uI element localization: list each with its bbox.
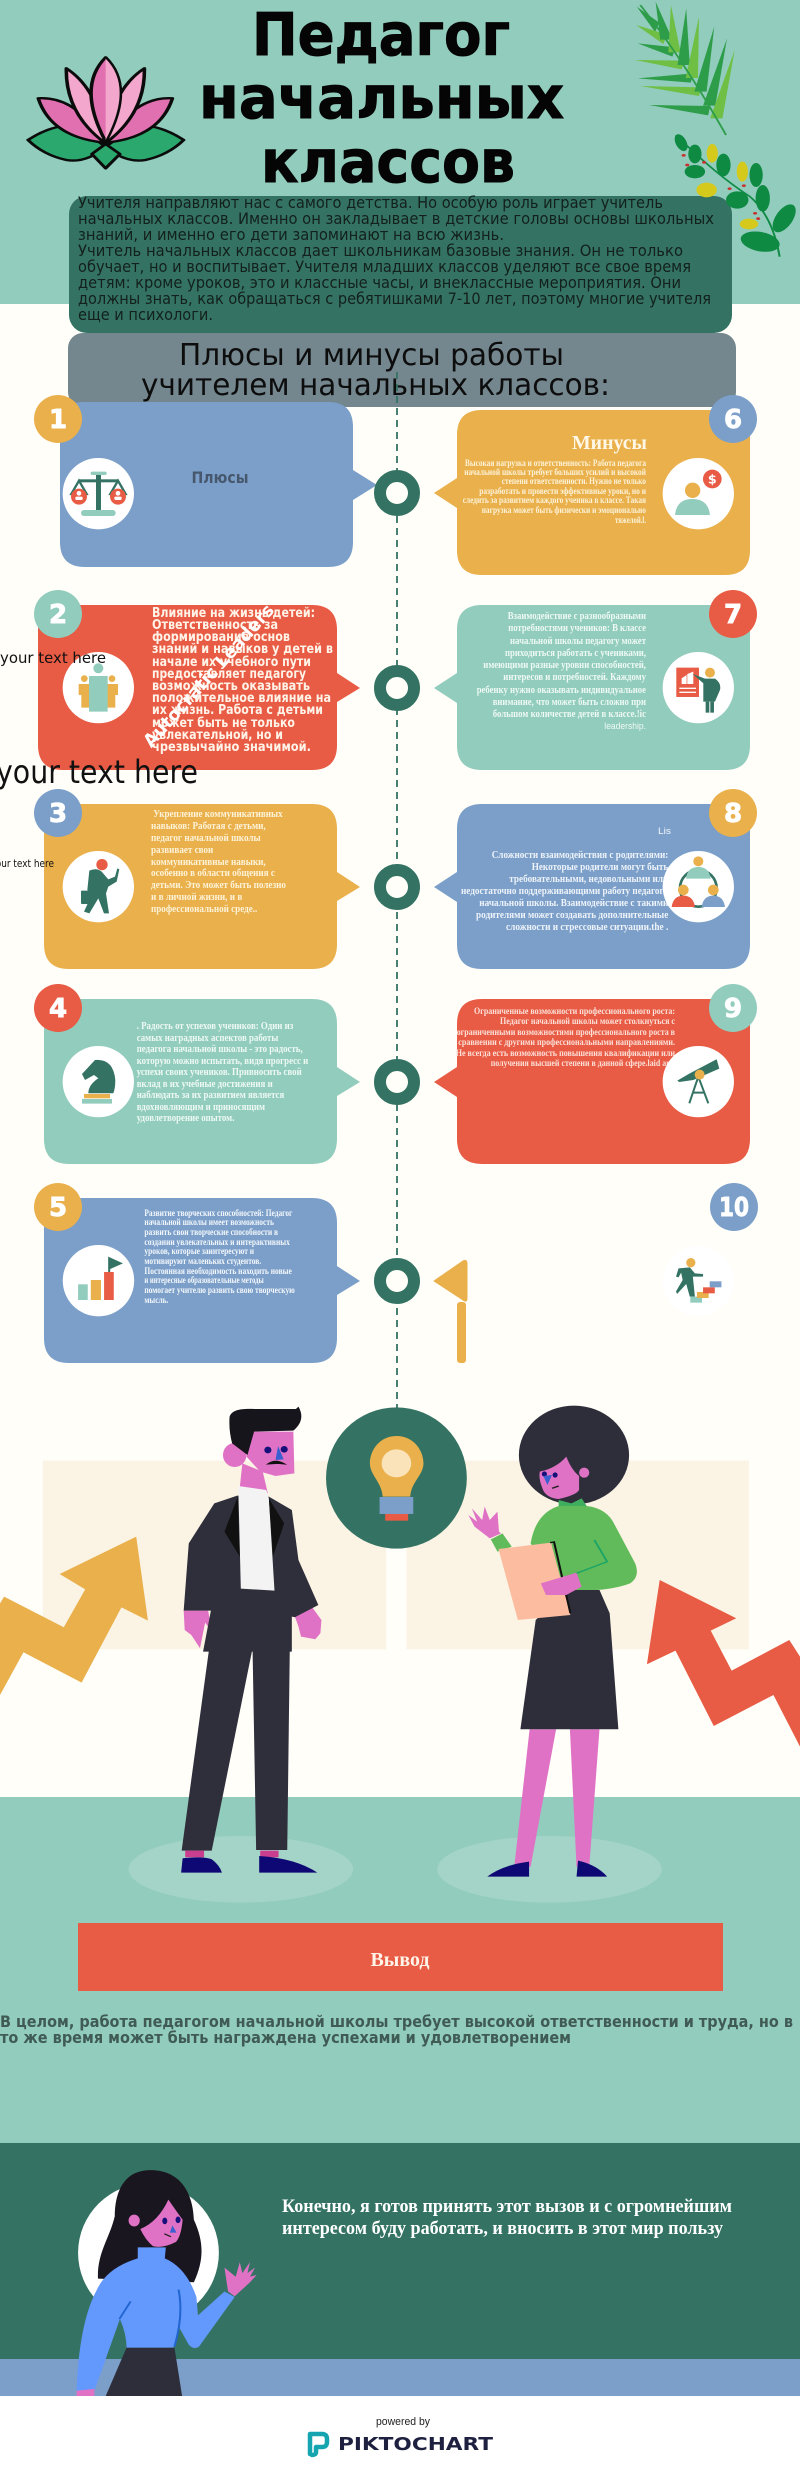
- card 4 text: самых наградных аспектов работы: [137, 1033, 278, 1044]
- intro text: знаний, и именно его дети запоминают на всю жизнь.: [78, 225, 504, 244]
- card 8 text: требовательными, недовольными или: [509, 874, 668, 885]
- badge 5: 5: [49, 1193, 67, 1223]
- panel: card 2: [38, 600, 360, 770]
- badge 9: [709, 984, 757, 1032]
- badge 10: 10: [719, 1193, 749, 1223]
- badge 7: [709, 590, 757, 638]
- card 5 text: мотивируют маленьких студентов.: [144, 1257, 261, 1267]
- panel: card 6 cons: [434, 410, 750, 575]
- card 7 text: имеющими разные уровни способностей,: [483, 660, 646, 671]
- card 7 text: Взаимодействие с разнообразными: [508, 611, 646, 622]
- figure: woman with tablet: [468, 1406, 637, 1877]
- card 2 text: увлекательной, но и: [152, 728, 283, 743]
- card 5 text: [144, 1208, 295, 1306]
- card 6 text: нагрузка может быть физически и эмоционально: [482, 505, 646, 516]
- card 6 text: начальной школы требует больших усилий и высокой: [464, 467, 646, 478]
- card 2 text: предоставляет педагогу: [152, 667, 306, 682]
- background: lower teal ground: [0, 1797, 800, 2143]
- card 4 text: вклад в их учебные достижения и: [137, 1079, 273, 1090]
- card 5 text: помогает учителю развить свою творческую: [144, 1286, 295, 1296]
- card 7 text: большом количестве детей в классе.!ic: [493, 709, 646, 720]
- badge 2: 2: [49, 600, 67, 630]
- intro text: должны знать, как обращаться с ребятишками 7-10 лет, поэтому многие учителя: [78, 289, 711, 308]
- title: начальных: [199, 63, 564, 132]
- badge 1: [34, 395, 82, 443]
- timeline node 1: [380, 476, 414, 510]
- card 2 text: может быть не только: [152, 716, 295, 731]
- card 5 text: развить свои творческие способности в: [144, 1227, 278, 1238]
- icon: runner on stairs: [663, 1246, 734, 1316]
- badge 2: [34, 590, 82, 638]
- card 6 text: тяжелой.l.: [615, 515, 646, 526]
- badge 5: [34, 1183, 82, 1231]
- card 2 text: знаний и навыков у детей в: [152, 642, 333, 657]
- footer white: [0, 2396, 800, 2476]
- panel: card 5: [44, 1198, 360, 1363]
- icon: chess knight: [63, 1046, 134, 1117]
- icon: berry branch: [672, 133, 800, 257]
- badge 3: [34, 789, 82, 837]
- subtitle: учителем начальных классов:: [141, 368, 610, 403]
- card 9 text: ограниченными возможностями профессионального роста в: [457, 1027, 675, 1038]
- card 3 text: развивает свои: [151, 845, 213, 856]
- badge 1: 1: [49, 405, 67, 435]
- icon: bar chart with flag: [63, 1245, 134, 1316]
- ground shadows: [129, 1836, 662, 1903]
- badge 3: 3: [49, 799, 67, 829]
- card 7 text: интересов и потребностей. Каждому: [503, 672, 647, 683]
- title: Педагог: [252, 0, 510, 69]
- card 6 text: Высокая нагрузка и ответственность: Работа педагога: [465, 458, 646, 469]
- card 4 text: [137, 1021, 308, 1124]
- card 9 text: [456, 1006, 676, 1069]
- card 4 text: педагога начальной школы - это радость,: [137, 1044, 303, 1055]
- intro text: Учитель начальных классов дает школьникам базовые знания. Он не только: [78, 241, 683, 260]
- panel: closing dark green band: [0, 2143, 800, 2359]
- panel: card 1 pros: [60, 402, 377, 567]
- badge 4: [34, 984, 82, 1032]
- card 6 text: следить за развитием каждого ученика в классе. Такая: [463, 496, 646, 506]
- card 9 text: Ограниченные возможности профессионального роста:: [474, 1006, 675, 1017]
- arrow red: [647, 1580, 800, 1747]
- title: [199, 0, 564, 196]
- card 4 text: которую можно испытать, видя прогресс и: [137, 1056, 308, 1067]
- card 6 text: [463, 458, 646, 526]
- arrow amber: [0, 1537, 148, 1695]
- closing text: интересом буду работать, и вносить в этот мир пользу: [282, 2218, 723, 2239]
- card 8 text: недостаточно поддерживающими работу педагога: [461, 886, 669, 897]
- timeline node 2: [380, 671, 414, 705]
- figure: man: [181, 1407, 321, 1873]
- conclusion text: то же время может быть награждена успехами и удовлетворением: [0, 2028, 571, 2047]
- card 9 text: получения высшей степени в данной сфере.laid and: [491, 1058, 676, 1069]
- logo: Piktochart: PIKTOCHART: [338, 2434, 494, 2455]
- card 8 text: Некоторые родители могут быть: [532, 862, 669, 873]
- card 2 text: начале их учебного пути: [152, 655, 311, 670]
- card 1 heading: Плюсы: [192, 468, 248, 487]
- timeline node 5: [380, 1264, 414, 1298]
- intro text: начальных классов. Именно он закладывает в детские головы основы школьных: [78, 209, 714, 228]
- card 7 text: потребностями учеников: В классе: [508, 623, 646, 634]
- panel: conclusion heading: Вывод: [370, 1949, 430, 1971]
- beige panels: [43, 1461, 749, 1649]
- card 3 text: Укрепление коммуникативных: [153, 809, 283, 820]
- card 8 text: Сложности взаимодействия с родителями:: [492, 850, 668, 861]
- card 5 text: мысль.: [144, 1296, 168, 1306]
- badge 6: 6: [724, 405, 742, 435]
- icon: palm leaf: [635, 2, 735, 135]
- card 3 text: особенно в области общения с: [151, 868, 275, 879]
- timeline dashed line: [396, 372, 398, 1410]
- closing text: Конечно, я готов принять этот вызов и с огромнейшим: [282, 2196, 732, 2217]
- card 3 text: детьми. Это может быть полезно: [151, 880, 286, 891]
- card 6 heading: Минусы: [572, 432, 647, 454]
- icon: light bulb: [326, 1407, 467, 1549]
- card 9 text: сравнении с другими профессиональными направлениями.: [458, 1037, 675, 1048]
- timeline node 3: [380, 870, 414, 904]
- panel: card 9: [434, 999, 750, 1164]
- card 2 text: их жизнь. Работа с детьми: [152, 703, 323, 718]
- placeholder text large: your text here: [0, 753, 198, 791]
- intro text: [78, 193, 714, 324]
- icon: person with dollar: $: [708, 472, 717, 487]
- card 7 text: начальной школы педагогу может: [510, 636, 647, 647]
- title: классов: [261, 127, 515, 196]
- card 3 text: профессиональной среде..: [151, 904, 258, 915]
- rotated label: Autocratic Leaders: [139, 600, 279, 752]
- panel: conclusion heading: [78, 1923, 723, 1991]
- intro text: Учителя направляют нас с самого детства. Но особую роль играет учитель: [78, 193, 663, 212]
- card 6 text: разработать и провести эффективные уроки, но и: [479, 486, 646, 497]
- card 5 text: начальной школы имеет возможность: [144, 1217, 274, 1228]
- card 3 text: [151, 809, 286, 915]
- card 5 text: и интересные образовательные методы: [144, 1275, 264, 1286]
- card 7 text: ребенку нужно оказывать индивидуальное: [477, 685, 646, 696]
- placeholder text small: your text here: [0, 649, 106, 667]
- icon: presenter with chart: [663, 652, 734, 723]
- badge 8: 8: [724, 799, 742, 829]
- card 8 small label: Lis: [658, 826, 672, 836]
- panel: card 3: [44, 804, 360, 969]
- card 7 text: [477, 611, 647, 731]
- icon: scales: [63, 458, 134, 529]
- icon: person with dollar: [663, 458, 734, 529]
- card 4 text: успехи своих учеников. Привносить свой: [137, 1067, 302, 1078]
- badge 8: [709, 789, 757, 837]
- subtitle: [141, 338, 610, 403]
- intro text: детям: кроме уроков, это и классные часы, и внеклассные мероприятия. Они: [78, 273, 681, 292]
- timeline node 4: [380, 1065, 414, 1099]
- panel: card 7: [434, 605, 750, 770]
- blue strip: [0, 2359, 800, 2396]
- card 5 text: создании увлекательных и интерактивных: [144, 1238, 290, 1248]
- conclusion text: [0, 2012, 793, 2047]
- card 7 text: внимание, что может быть сложно при: [493, 697, 646, 708]
- illustration: two teachers and idea: [0, 1406, 800, 1903]
- icon: lotus: [28, 57, 184, 168]
- card 8 text: начальной школы. Взаимодействие с такими: [479, 898, 668, 909]
- subtitle: Плюсы и минусы работы: [179, 338, 564, 373]
- powered by: powered by: [376, 2416, 430, 2428]
- badge 9: 9: [724, 994, 742, 1024]
- icon: group of people: [63, 652, 134, 723]
- card 2 text: формирование основ: [152, 630, 290, 645]
- card 3 text: навыков: Работая с детьми,: [151, 821, 266, 832]
- panel: card 10 remnant: [434, 1246, 734, 1363]
- card 7 text: leadership.: [604, 721, 646, 731]
- card 5 text: Развитие творческих способностей: Педагог: [144, 1208, 293, 1219]
- card 2 text: положительное влияние на: [152, 691, 331, 706]
- badge 6: [709, 395, 757, 443]
- card 9 text: Педагог начальной школы может столкнуться с: [500, 1016, 675, 1027]
- card 2 text: чрезвычайно значимой.: [152, 740, 311, 755]
- card 8 text: [461, 850, 669, 933]
- card 8 text: сложности и стрессовые ситуации.the .: [506, 922, 669, 933]
- card 4 text: удовлетворение опытом.: [137, 1113, 235, 1124]
- card 4 text: . Радость от успехов учеников: Один из: [137, 1021, 293, 1032]
- figure: waving woman: [77, 2170, 257, 2396]
- badge 7: 7: [724, 600, 742, 630]
- panel: card 8: [434, 804, 750, 969]
- card 7 text: приходиться работать с учениками,: [505, 648, 646, 659]
- badge 4: 4: [49, 994, 67, 1024]
- card 9 text: Не всегда есть возможность повышения квалификации или: [456, 1048, 675, 1059]
- card 5 text: уроков, которые заинтересуют и: [144, 1247, 255, 1257]
- intro text: обучает, но и воспитывает. Учителя младших классов уделяют все свое время: [78, 257, 691, 276]
- panel: intro text box: [69, 193, 732, 333]
- card 6 text: степени ответственности. Нужно не только: [502, 477, 646, 487]
- intro text: еще и психологи.: [78, 305, 213, 324]
- card 3 text: и в личной жизни, и в: [151, 892, 243, 903]
- badge 10: [710, 1183, 758, 1231]
- closing text: [282, 2196, 732, 2239]
- card 2 text: [152, 606, 333, 755]
- panel: card 4: [44, 999, 360, 1164]
- background: top teal band: [0, 0, 800, 304]
- card 4 text: вдохновляющим и приносящим: [137, 1102, 265, 1113]
- card 3 text: педагог начальной школы: [151, 833, 261, 844]
- card 8 text: родителями может создавать дополнительные: [476, 910, 669, 921]
- card 5 text: Постоянная необходимость находить новые: [144, 1266, 292, 1277]
- panel: subtitle box: [68, 333, 736, 407]
- icon: telescope: [663, 1046, 734, 1117]
- card 3 text: коммуникативные навыки,: [151, 857, 266, 868]
- icon: team circle: [663, 851, 734, 922]
- icon: walking person: [63, 851, 134, 922]
- card 4 text: наблюдать за их развитием является: [137, 1090, 285, 1101]
- card 2 text: Влияние на жизнь детей:: [152, 606, 315, 621]
- card 2 text: возможность оказывать: [152, 679, 310, 694]
- card 2 text: Ответственность за: [152, 618, 278, 633]
